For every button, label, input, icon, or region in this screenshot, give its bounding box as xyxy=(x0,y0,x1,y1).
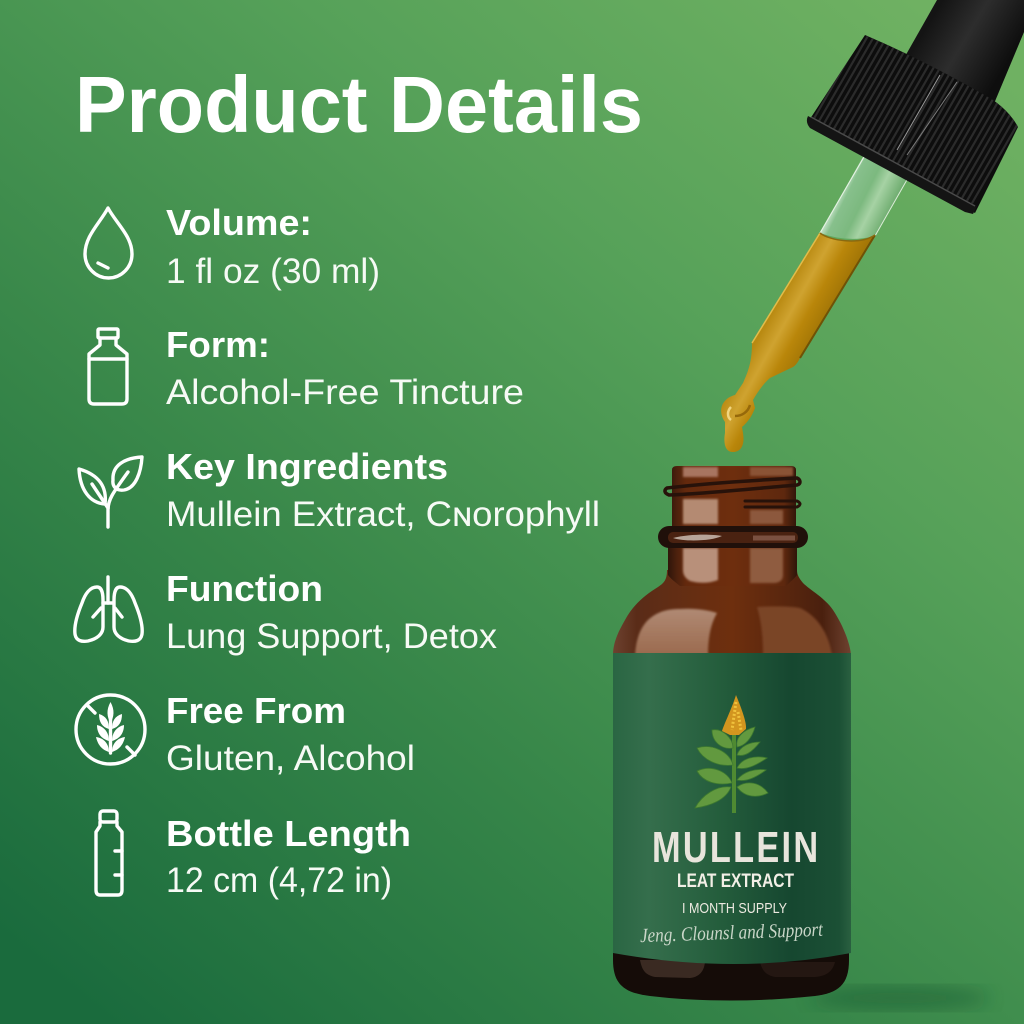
glass tube xyxy=(820,148,912,239)
icon: lungs xyxy=(75,577,142,641)
dropper xyxy=(721,0,1024,452)
icon: water drop xyxy=(85,208,132,278)
volume value: 1 fl oz (30 ml) xyxy=(166,252,380,291)
amber neck xyxy=(668,466,797,586)
amber shoulder xyxy=(613,570,851,655)
cap rim xyxy=(807,116,977,214)
icon: bottle xyxy=(89,329,127,404)
neck ring xyxy=(658,526,808,548)
label script line: Jeng. Clounsl and Support xyxy=(640,919,824,947)
label title: MULLEIN xyxy=(652,823,818,872)
neck highlights xyxy=(683,467,793,583)
icon: sprout xyxy=(79,457,142,527)
detail: bottle length xyxy=(96,811,411,900)
function heading: Function xyxy=(166,568,323,609)
form heading: Form: xyxy=(166,324,270,365)
detail: free from xyxy=(76,690,415,778)
shoulder highlight left xyxy=(635,609,717,655)
form value: Alcohol-Free Tincture xyxy=(166,373,524,412)
label plant illustration xyxy=(695,695,768,813)
key ingredients value: Mullein Extract, Cɴorophyll xyxy=(166,495,600,534)
detail: form xyxy=(89,324,524,412)
key ingredients heading: Key Ingredients xyxy=(166,446,448,487)
thread rings xyxy=(665,478,800,507)
oil in pipette xyxy=(721,233,875,452)
detail: key ingredients xyxy=(79,446,600,534)
label subtitle: LEAT EXTRACT xyxy=(677,871,794,892)
detail: volume xyxy=(85,202,380,291)
bottle length value: 12 cm (4,72 in) xyxy=(166,861,392,900)
function value: Lung Support, Detox xyxy=(166,617,498,656)
title: Product Details xyxy=(75,60,643,149)
plant flower spike xyxy=(722,695,746,735)
bottle base xyxy=(613,900,849,1000)
bottle shadow xyxy=(810,986,990,1010)
free from value: Gluten, Alcohol xyxy=(166,739,415,778)
shoulder highlight right xyxy=(757,606,832,655)
icon: no gluten xyxy=(76,695,145,764)
bottle xyxy=(613,466,851,1000)
bottle length heading: Bottle Length xyxy=(166,813,411,854)
ribbed cap xyxy=(807,35,1018,214)
free from heading: Free From xyxy=(166,690,346,731)
plant leaves xyxy=(695,727,768,808)
icon: slim bottle with marks xyxy=(96,811,122,895)
label supply: I MONTH SUPPLY xyxy=(682,901,787,917)
green label xyxy=(613,653,851,964)
dropper rubber bulb xyxy=(903,0,1024,118)
detail: function xyxy=(75,568,498,656)
volume heading: Volume: xyxy=(166,202,312,243)
